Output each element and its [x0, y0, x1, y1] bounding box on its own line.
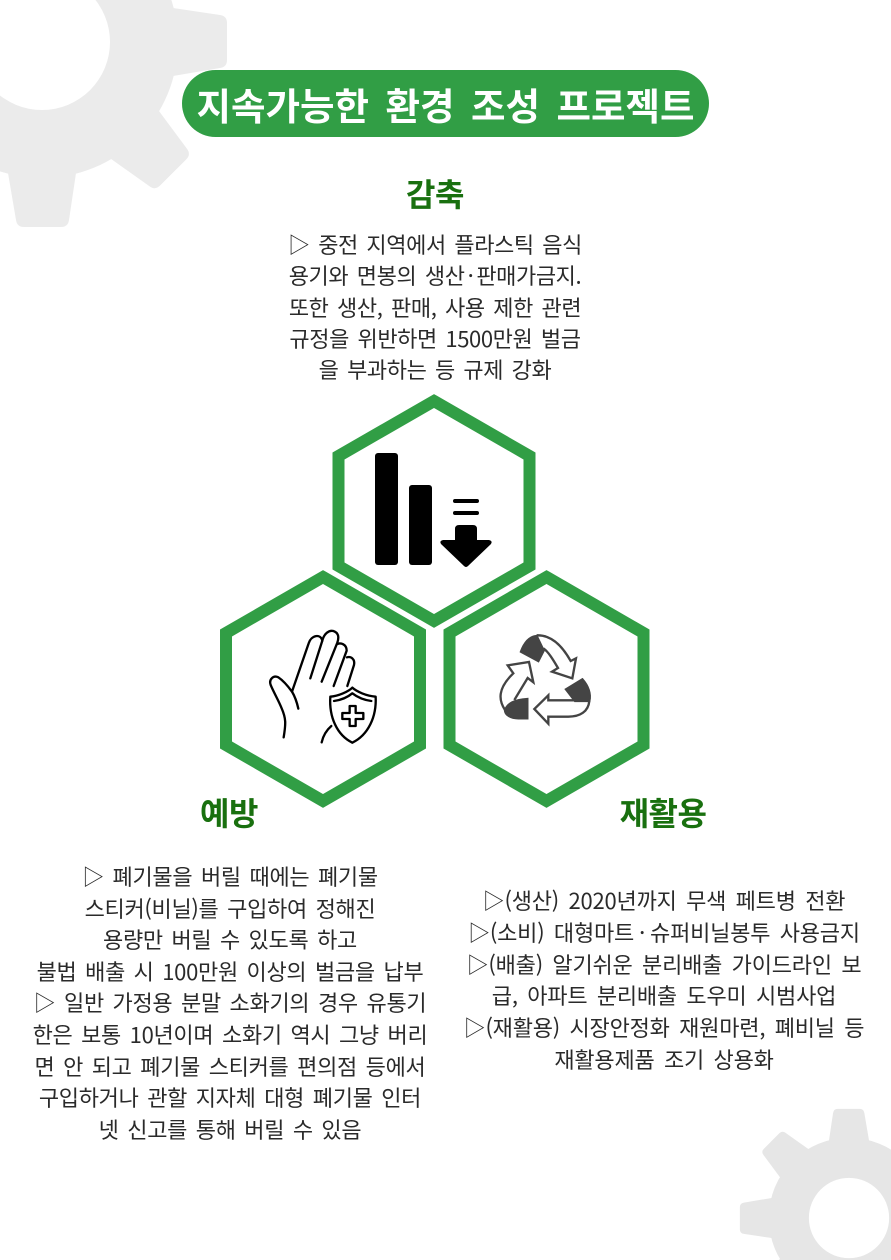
text block: prevention: [33, 860, 427, 1145]
text block: reduction: [288, 228, 582, 385]
text block: recycling: ▷(소비) 대형마트·슈퍼비닐봉투 사용금지: [468, 916, 860, 948]
text block: prevention: 불법 배출 시 100만원 이상의 벌금을 납부: [37, 955, 423, 987]
text block: prevention: ▷ 일반 가정용 분말 소화기의 경우 유통기: [34, 986, 426, 1018]
text block: prevention: 면 안 되고 폐기물 스티커를 편의점 등에서: [35, 1050, 425, 1082]
icon: recycling arrows: [501, 635, 590, 724]
text block: recycling: 재활용제품 조기 상용화: [554, 1043, 774, 1075]
heading: prevention: 예방: [200, 789, 258, 835]
text block: reduction: 규정을 위반하면 1500만원 벌금: [289, 322, 581, 354]
text block: recycling: ▷(재활용) 시장안정화 재원마련, 폐비닐 등: [464, 1011, 864, 1043]
text block: recycling: 급, 아파트 분리배출 도우미 시범사업: [492, 979, 836, 1011]
text block: prevention: 스티커(비닐)를 구입하여 정해진: [85, 892, 375, 924]
icon: bars with down arrow: [375, 453, 492, 567]
icon: hand with shield: [270, 631, 376, 743]
text block: recycling: ▷(배출) 알기쉬운 분리배출 가이드라인 보: [467, 948, 861, 980]
title: 지속가능한 환경 조성 프로젝트: [196, 76, 694, 131]
text block: recycling: [464, 884, 864, 1075]
text block: recycling: ▷(생산) 2020년까지 무색 페트병 전환: [483, 884, 845, 916]
text block: prevention: 구입하거나 관할 지자체 대형 폐기물 인터: [39, 1081, 421, 1113]
text block: reduction: 또한 생산, 판매, 사용 제한 관련: [289, 290, 581, 322]
text block: prevention: 한은 보통 10년이며 소화기 역시 그냥 버리: [33, 1018, 427, 1050]
text block: prevention: 용량만 버릴 수 있도록 하고: [103, 923, 357, 955]
text block: prevention: ▷ 폐기물을 버릴 때에는 폐기물: [82, 860, 378, 892]
text block: reduction: 을 부과하는 등 규제 강화: [319, 353, 551, 385]
heading: recycling: 재활용: [620, 789, 706, 835]
text block: reduction: 용기와 면봉의 생산·판매가금지.: [289, 259, 581, 291]
heading: reduction: 감축: [406, 170, 464, 216]
text block: prevention: 넷 신고를 통해 버릴 수 있음: [99, 1113, 361, 1145]
text block: reduction: ▷ 중전 지역에서 플라스틱 음식: [288, 228, 582, 260]
